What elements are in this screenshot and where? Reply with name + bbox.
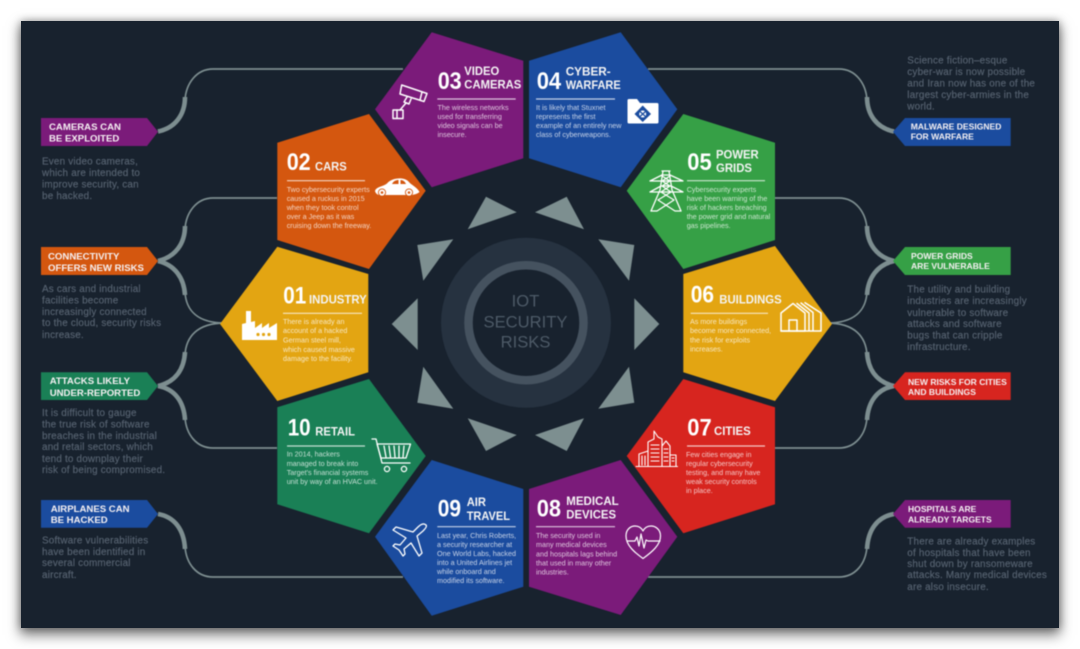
panel: 05 power grids: 05 — [687, 149, 712, 176]
text: hospitals description: attacks. Many medical devices — [907, 570, 1047, 581]
text: connectivity description: to the cloud, security risks — [42, 318, 161, 329]
icon: airplane — [393, 524, 426, 556]
panel: 10 retail: unit by way of an HVAC unit. — [287, 477, 378, 486]
tag: hospitals are already targets: HOSPITALS ARE — [908, 504, 977, 514]
tag: power grids are vulnerable — [893, 247, 1011, 275]
panel: 05 power grids: gas pipelines. — [687, 221, 731, 230]
text: cameras description: improve security, can — [42, 180, 139, 190]
panel: 05 power grids: risk of hackers breaching — [687, 203, 767, 212]
tag: cameras can be exploited: CAMERAS CAN — [49, 122, 121, 133]
tag: attacks likely under-reported — [41, 372, 158, 400]
panel: 10 retail: In 2014, hackers — [287, 450, 340, 459]
text: malware description: world. — [906, 102, 935, 112]
tag: malware designed for warfare — [893, 118, 1011, 146]
panel: 03 video cameras: CAMERAS — [464, 78, 521, 92]
panel: 09 air travel: TRAVEL — [467, 509, 510, 523]
panel: 10 retail: managed to break into — [287, 459, 358, 468]
panel: 02 cars: caused a ruckus in 2015 — [287, 194, 365, 203]
panel: 03 video cameras: The wireless networks — [438, 103, 509, 112]
text: connectivity description: facilities become — [42, 296, 119, 306]
icon: buildings — [781, 303, 821, 331]
icon: factory — [242, 311, 277, 340]
panel: 08 medical devices: many medical devices — [536, 540, 607, 549]
panel: 06 buildings: the risk for exploits — [690, 336, 750, 344]
panel: 07 cities: testing, and many have — [686, 468, 760, 477]
panel: 05 power grids: Cybersecurity experts — [687, 185, 757, 194]
center title: IOT — [512, 292, 539, 311]
panel: 04 cyber-warfare: 04 — [537, 68, 562, 95]
panel: 04 cyber-warfare: CYBER- — [566, 65, 611, 79]
panel: 02 cars: 02 — [287, 149, 311, 176]
panel: 08 medical devices: DEVICES — [566, 508, 616, 522]
panel: 09 air travel: 09 — [438, 496, 461, 523]
text: hospitals description: of hospitals that have been — [907, 548, 1031, 559]
text: attacks description: and retail sectors, which — [42, 442, 153, 453]
text: cameras description: Even video cameras, — [42, 156, 138, 168]
tag: cameras can be exploited — [41, 118, 158, 146]
tag: new risks for cities and buildings: AND BUILDINGS — [908, 387, 976, 397]
panel: 03 video cameras: insecure. — [438, 130, 467, 139]
panel: 08 medical devices: that used in many other — [536, 558, 612, 568]
panel: 09 air travel: a security researcher at — [437, 540, 512, 549]
text: hospitals description: are also insecure. — [907, 582, 989, 593]
panel: 03 video cameras: 03 — [438, 68, 462, 95]
panel: 02 cars: cruising down the freeway. — [287, 221, 371, 230]
panel: 03 video cameras: used for transferring — [438, 112, 502, 121]
panel: 01 industry: damage to the facility. — [283, 354, 352, 363]
tag: malware designed for warfare: MALWARE DESIGNED — [911, 122, 1001, 132]
center title: RISKS — [501, 333, 550, 352]
text: power grids description: vulnerable to software — [907, 308, 1009, 319]
tag: connectivity offers new risks: CONNECTIVITY — [48, 252, 120, 262]
panel: 07 cities: 07 — [687, 415, 712, 442]
icon: security camera — [393, 85, 427, 118]
text: connectivity description: As cars and industrial — [42, 284, 141, 295]
text: hospitals description: shut down by ransomeware — [907, 559, 1033, 570]
tag: attacks likely under-reported: UNDER-REPORTED — [50, 388, 140, 399]
icon: city skyline — [636, 431, 678, 466]
text: attacks description: It is difficult to gauge — [42, 408, 137, 419]
tag: attacks likely under-reported: ATTACKS LIKELY — [50, 376, 131, 387]
center emblem — [441, 238, 611, 408]
tag: connectivity offers new risks — [41, 247, 158, 275]
panel: 08 medical devices: and hospitals lags behind — [536, 549, 617, 558]
panel: 07 cities: regular cybersecurity — [686, 459, 753, 468]
center title: SECURITY — [484, 312, 567, 331]
panel: 10 retail: 10 — [288, 415, 311, 442]
panel: 06 buildings: 06 — [691, 281, 714, 308]
panel: 05 power grids: POWER — [716, 147, 759, 161]
tag: airplanes can be hacked — [41, 500, 158, 528]
panel: 04 cyber-warfare — [529, 32, 677, 187]
tag: new risks for cities and buildings — [893, 372, 1011, 400]
panel: 01 industry: which caused massive — [282, 345, 355, 354]
tag: power grids are vulnerable: POWER GRIDS — [911, 251, 973, 261]
panel: 06 buildings: increases. — [690, 344, 723, 354]
panel: 07 cities: weak security controls — [685, 477, 757, 486]
panel: 05 power grids: the power grid and natural — [687, 212, 771, 221]
text: malware description: Science fiction–esque — [907, 56, 1008, 66]
icon: heart with pulse — [626, 526, 660, 558]
panel: 04 cyber-warfare: class of cyberweapons. — [536, 130, 611, 139]
tag: hospitals are already targets: ALREADY TARGETS — [908, 514, 992, 524]
connectors: left side — [158, 69, 403, 577]
text: malware description: cyber-war is now possible — [907, 67, 1026, 78]
panel: 04 cyber-warfare: WARFARE — [566, 78, 621, 92]
connectors: right side — [648, 69, 894, 577]
text: cameras description: be hacked. — [42, 191, 92, 202]
text: malware description: largest cyber-armies in the — [907, 90, 1029, 101]
icon: shopping cart — [372, 439, 410, 472]
text: power grids description: industries are increasingly — [907, 296, 1027, 307]
panel: 04 cyber-warfare: It is likely that Stuxnet — [536, 103, 606, 112]
panel: 10 retail — [277, 379, 426, 533]
panel: 08 medical devices: 08 — [537, 496, 561, 523]
icon: transmission tower — [650, 171, 683, 211]
text: airplanes description: aircraft. — [42, 570, 77, 581]
panel: 08 medical devices: The security used in — [536, 531, 600, 540]
panel: 06 buildings: become more connected, — [690, 326, 771, 335]
panel: 10 retail: RETAIL — [315, 425, 355, 439]
panel: 07 cities: CITIES — [714, 424, 751, 438]
panel: 01 industry: 01 — [283, 282, 306, 309]
panel: 01 industry: INDUSTRY — [309, 292, 367, 306]
text: airplanes description: several commercial — [42, 558, 131, 569]
panel: 08 medical devices: MEDICAL — [566, 494, 619, 508]
text: attacks description: breaches in the industrial — [42, 431, 157, 442]
panel: 09 air travel: while onboard and — [436, 567, 496, 576]
panel: 08 medical devices: industries. — [536, 568, 569, 576]
panel: 07 cities: in place. — [686, 486, 713, 495]
panel: 09 air travel: AIR — [467, 495, 486, 509]
panel: 05 power grids: GRIDS — [716, 161, 752, 175]
panel: 04 cyber-warfare: example of an entirely new — [536, 121, 622, 130]
panel: 09 air travel: One World Labs, hacked — [437, 549, 516, 558]
panel: 06 buildings — [683, 246, 832, 401]
panel: 03 video cameras — [375, 32, 523, 187]
text: power grids description: infrastructure. — [907, 342, 971, 353]
panel: 01 industry: German steel mill, — [283, 336, 341, 344]
text: power grids description: The utility and building — [907, 284, 1010, 296]
text: power grids description: bugs that can cripple — [907, 330, 1003, 342]
panel: 04 cyber-warfare: represents the first — [536, 112, 596, 121]
icon: car — [375, 178, 420, 196]
text: malware description: and Iran now has one of the — [907, 78, 1035, 90]
panel: 01 industry: There is already an — [283, 317, 345, 326]
text: attacks description: risk of being compromised. — [42, 465, 165, 476]
panel: 01 industry — [220, 247, 368, 401]
panel: 05 power grids: have been warning of the — [687, 194, 767, 203]
tag: cameras can be exploited: BE EXPLOITED — [49, 134, 119, 144]
panel: 02 cars: Two cybersecurity experts — [287, 185, 370, 194]
tag: malware designed for warfare: FOR WARFARE — [911, 132, 974, 142]
panel: 03 video cameras: video signals can be — [438, 121, 503, 130]
text: cameras description: which are intended to — [41, 168, 140, 179]
panel: 05 power grids — [627, 114, 775, 269]
text: connectivity description: increasingly connected — [42, 307, 147, 318]
panel: 09 air travel — [375, 460, 523, 616]
panel: 06 buildings: BUILDINGS — [719, 292, 782, 306]
tag: new risks for cities and buildings: NEW RISKS FOR CITIES — [908, 377, 1007, 387]
panel: 10 retail: Target's financial systems — [287, 468, 369, 477]
panel: 02 cars — [277, 114, 426, 269]
panel: 09 air travel: into a United Airlines jet — [437, 558, 512, 567]
panel: 06 buildings: As more buildings — [690, 317, 748, 326]
panel: 02 cars: over a Jeep as it was — [287, 212, 355, 221]
panel: 02 cars: when they took control — [286, 203, 359, 212]
text: connectivity description: increase. — [42, 330, 84, 341]
text: attacks description: tend to downplay their — [42, 454, 144, 465]
panel: 07 cities — [627, 379, 775, 533]
panel: 07 cities: Few cities engage in — [686, 450, 752, 459]
tag: airplanes can be hacked: BE HACKED — [51, 515, 108, 526]
tag: power grids are vulnerable: ARE VULNERABLE — [911, 261, 990, 271]
tag: hospitals are already targets — [893, 500, 1011, 528]
text: hospitals description: There are already examples — [907, 536, 1035, 548]
panel: 01 industry: account of a hacked — [283, 326, 347, 335]
panel: 02 cars: CARS — [315, 160, 347, 174]
panel: 08 medical devices — [529, 460, 677, 615]
text: airplanes description: have been identified in — [42, 547, 145, 558]
panel: 09 air travel: Last year, Chris Roberts, — [437, 531, 516, 540]
text: attacks description: the true risk of software — [42, 420, 150, 430]
tag: airplanes can be hacked: AIRPLANES CAN — [51, 504, 130, 515]
panel: 09 air travel: modified its software. — [437, 576, 505, 585]
text: airplanes description: Software vulnerabilities — [42, 536, 148, 546]
panel: 03 video cameras: VIDEO — [464, 64, 499, 78]
tag: connectivity offers new risks: OFFERS NEW RISKS — [48, 263, 145, 274]
text: power grids description: attacks and software — [907, 319, 1002, 330]
icon: folder — [628, 99, 658, 124]
ring of triangles — [392, 197, 659, 451]
